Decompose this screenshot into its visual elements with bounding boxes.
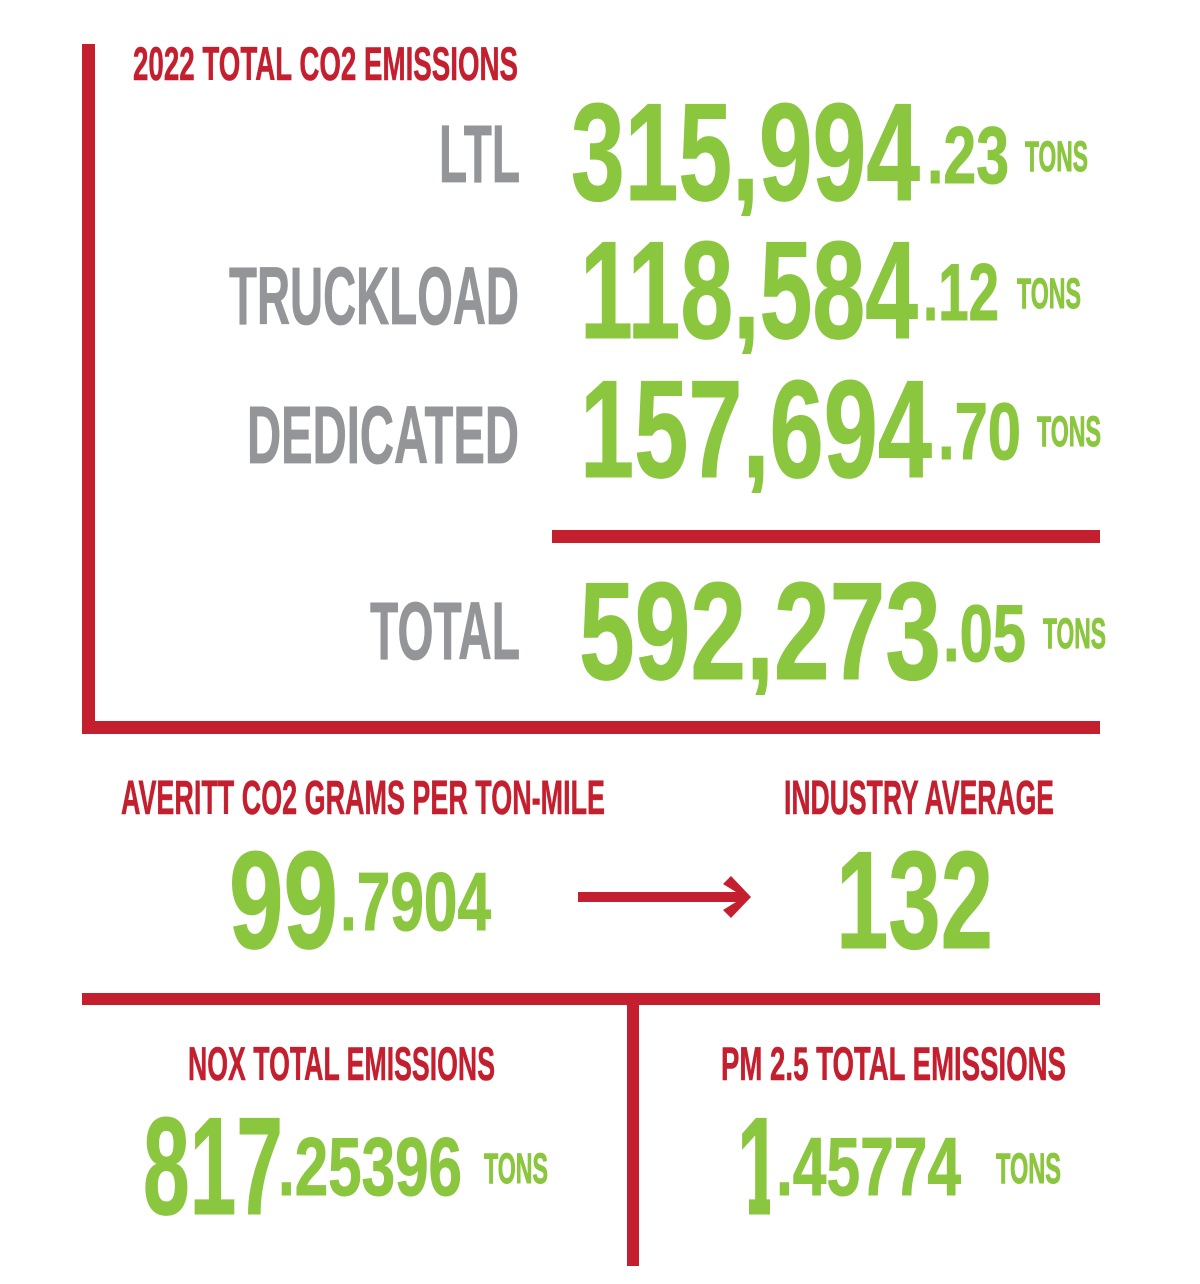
row: Dedicated [250,380,1100,493]
value: Dedicated decimal: .70 [938,387,1021,477]
divider above total [552,530,1100,543]
value: 132 [836,823,993,978]
value: Truckload whole: 118,584 [580,213,918,368]
value: Total decimal: .05 [943,589,1026,679]
value: LTL decimal: .23 [927,111,1009,201]
unit: TONS [996,1145,1061,1193]
value: LTL whole: 315,994 [571,75,920,230]
label: Dedicated: DEDICATED [247,390,519,481]
value whole: 817 [143,1089,283,1244]
value whole: 1 [737,1089,781,1244]
value: Truckload decimal: .12 [923,248,999,338]
divider lines bottom [82,993,1100,1266]
value decimal: .7904 [340,855,491,948]
value: Dedicated whole: 157,694 [580,352,932,507]
panel: Averitt grams per ton-mile [121,772,605,978]
heading: NOX TOTAL EMISSIONS [188,1037,495,1090]
panel: industry average [784,772,1054,978]
row: Total [370,582,1106,695]
value whole: 99 [229,823,338,978]
panel: frame top section [82,44,1100,734]
arrow [578,876,751,918]
panel: NOx [143,1037,548,1244]
unit: TONS [1037,408,1101,456]
row: LTL [442,102,1088,216]
value: Total whole: 592,273 [579,554,941,709]
unit: TONS [1025,133,1088,181]
panel: PM 2.5 [722,1046,1066,1214]
value decimal: .25396 [278,1120,462,1213]
label: Total: TOTAL [370,586,520,677]
heading: AVERITT CO2 GRAMS PER TON-MILE [121,772,605,825]
value decimal: .45774 [776,1120,961,1213]
unit: TONS [1017,270,1081,318]
label: Truckload: TRUCKLOAD [229,251,519,342]
row: Truckload [229,240,1080,354]
unit: TONS [484,1145,548,1193]
label: LTL: LTL [439,109,520,200]
title: 2022 TOTAL CO2 EMISSIONS [133,37,518,90]
unit: TONS [1043,610,1106,658]
